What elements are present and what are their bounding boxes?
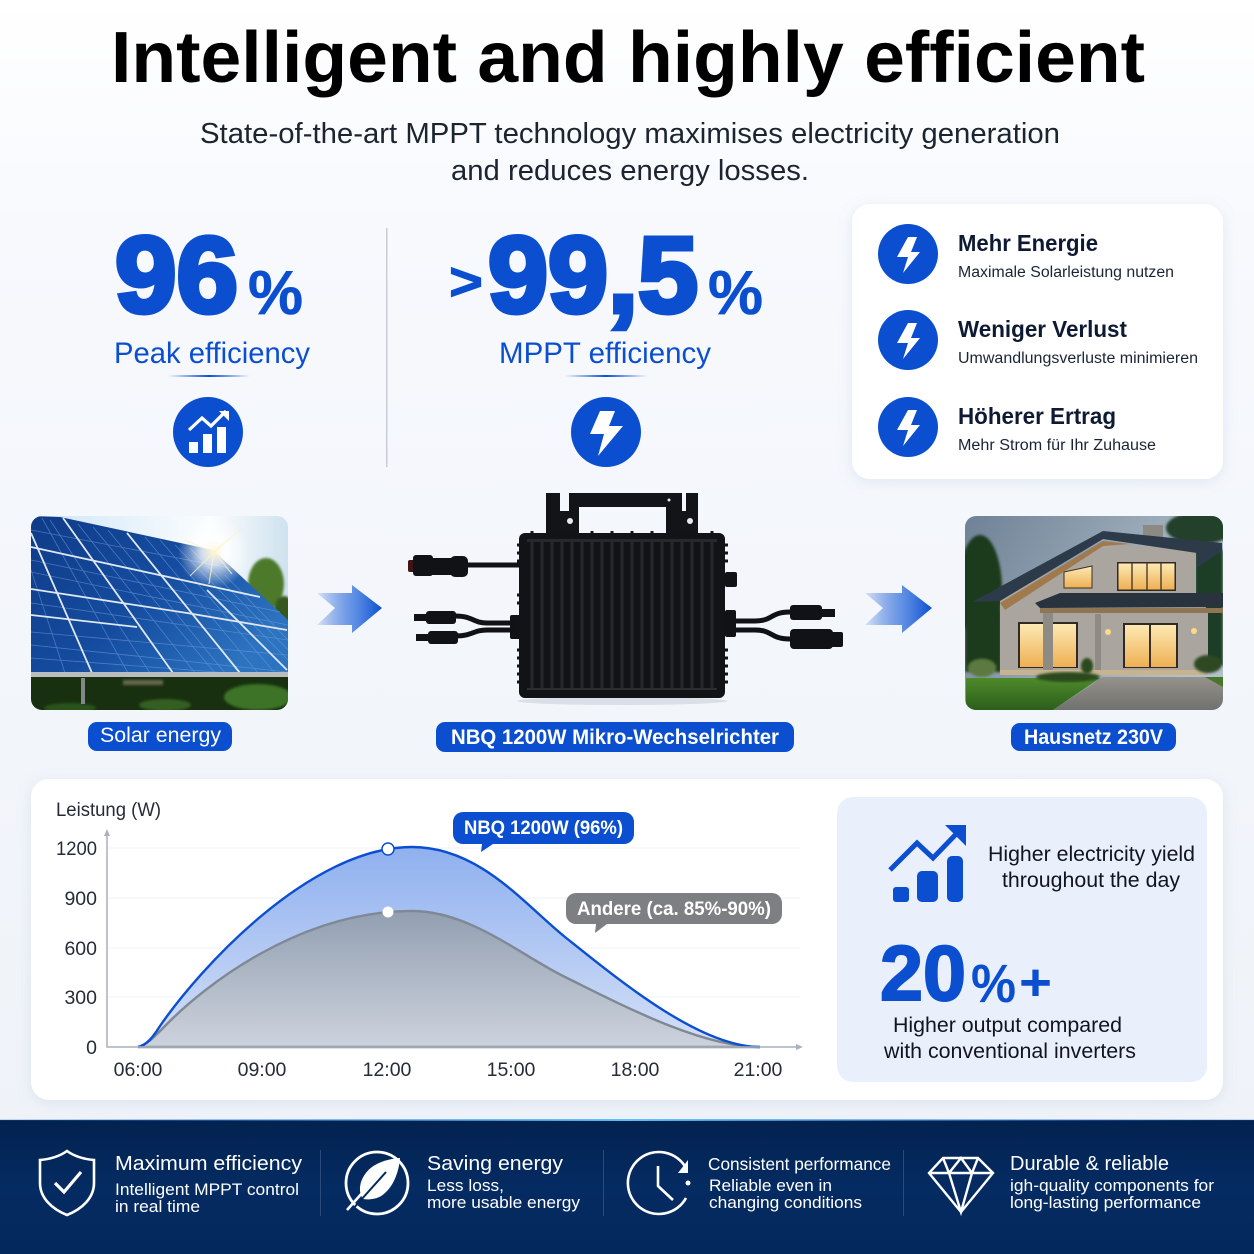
stat: peak efficiency: 96 — [115, 214, 238, 335]
benefit: higher yield: Höherer Ertrag — [958, 403, 1116, 429]
icon: diamond — [929, 1158, 993, 1212]
feature: consistent performance: Consistent performance — [708, 1154, 891, 1174]
axis labels: 600 — [64, 938, 97, 960]
axis labels — [56, 799, 783, 1081]
panel: higher output: Higher electricity yield — [988, 843, 1195, 866]
benefit: more energy: Maximale Solarleistung nutzen — [958, 264, 1174, 281]
photo: house — [958, 512, 1234, 710]
cables — [455, 565, 790, 639]
feature: maximum efficiency: Intelligent MPPT control — [115, 1180, 299, 1199]
markers — [382, 843, 394, 918]
benefit: more energy — [878, 224, 1174, 284]
inverter — [408, 493, 843, 705]
icon: leaf — [346, 1152, 408, 1214]
icon: clock — [628, 1152, 690, 1214]
axis labels: 15:00 — [487, 1059, 536, 1081]
divider — [386, 228, 388, 467]
axes — [107, 833, 798, 1047]
feature: durable: igh-quality components for — [1010, 1176, 1214, 1195]
feature: saving energy — [346, 1152, 580, 1214]
blue line — [138, 847, 760, 1047]
panel connectors — [414, 572, 843, 649]
benefit: less loss — [878, 310, 1198, 370]
stat: MPPT efficiency: MPPT efficiency — [499, 337, 711, 370]
icon: lightning bolt — [571, 397, 641, 467]
feature: consistent performance: changing conditions — [709, 1193, 862, 1212]
title: Intelligent and highly efficient — [111, 18, 1145, 98]
benefit: higher yield: Mehr Strom für Ihr Zuhause — [958, 437, 1156, 454]
icon: shield — [40, 1151, 94, 1215]
axis labels: Leistung (W) — [56, 799, 161, 821]
subtitle: State-of-the-art MPPT technology maximises electricity generation — [200, 118, 1060, 150]
stat: MPPT efficiency: > — [449, 252, 483, 312]
callout: NBQ: NBQ 1200W (96%) — [464, 818, 623, 839]
label: house grid: Hausnetz 230V — [1024, 726, 1163, 749]
feature: durable — [929, 1152, 1214, 1212]
icon: yield chart — [890, 825, 966, 902]
axis labels: 0 — [86, 1037, 97, 1059]
feature: maximum efficiency: in real time — [115, 1197, 200, 1216]
panel: higher output: % — [971, 954, 1016, 1014]
chart — [56, 799, 803, 1081]
stat: peak efficiency — [114, 214, 310, 467]
panel: benefits — [852, 204, 1223, 479]
arrow: inverter to house — [865, 585, 932, 633]
icon: growth chart — [173, 397, 243, 467]
feature: consistent performance — [628, 1152, 891, 1214]
mounting bracket — [546, 493, 698, 533]
panel: power chart — [31, 779, 1223, 1100]
stat: MPPT efficiency: 99,5 — [488, 214, 698, 335]
axis labels: 1200 — [56, 838, 97, 860]
photo: solar panel — [31, 516, 294, 713]
callout: others — [566, 893, 782, 933]
feature: saving energy: more usable energy — [427, 1193, 580, 1212]
feature: saving energy: Saving energy — [427, 1152, 564, 1175]
input connector — [408, 555, 468, 577]
blue area — [138, 847, 760, 1047]
subtitle: and reduces energy losses. — [451, 155, 809, 187]
stat: peak efficiency: Peak efficiency — [114, 337, 310, 370]
panel: higher output: Higher output compared — [893, 1014, 1122, 1037]
axis labels: 06:00 — [114, 1059, 163, 1081]
axis labels: 09:00 — [238, 1059, 287, 1081]
benefit: more energy: Mehr Energie — [958, 230, 1098, 256]
stat: MPPT efficiency: % — [708, 259, 763, 328]
footer band — [0, 1119, 1254, 1254]
callout: NBQ — [453, 812, 634, 852]
label: solar energy — [88, 722, 232, 751]
axis labels: 18:00 — [611, 1059, 660, 1081]
subtitle — [200, 118, 1060, 187]
feature: durable: long-lasting performance — [1010, 1193, 1201, 1212]
axis labels: 300 — [64, 987, 97, 1009]
feature: consistent performance: Reliable even in — [709, 1176, 832, 1195]
panel: higher output: 20 — [880, 929, 966, 1017]
benefit: higher yield — [878, 397, 1156, 457]
benefit: less loss: Umwandlungsverluste minimieren — [958, 350, 1198, 367]
axis labels: 900 — [64, 888, 97, 910]
callout: others: Andere (ca. 85%-90%) — [577, 899, 771, 920]
housing — [519, 533, 725, 698]
gray area — [138, 911, 760, 1047]
panel: higher output: throughout the day — [1002, 869, 1181, 892]
feature: saving energy: Less loss, — [427, 1176, 504, 1195]
feature: maximum efficiency — [40, 1151, 303, 1216]
stat: MPPT efficiency — [449, 214, 763, 467]
panel: higher output: + — [1019, 954, 1052, 1012]
label: solar energy: Solar energy — [100, 724, 221, 747]
arrow: solar to inverter — [317, 585, 382, 633]
stat: peak efficiency: % — [248, 259, 303, 328]
axis labels: 12:00 — [363, 1059, 412, 1081]
benefit: less loss: Weniger Verlust — [958, 316, 1127, 342]
feature: durable: Durable & reliable — [1010, 1152, 1169, 1175]
feature: maximum efficiency: Maximum efficiency — [115, 1152, 303, 1175]
panel: higher output — [837, 797, 1207, 1082]
axis labels: 21:00 — [734, 1059, 783, 1081]
panel: higher output: with conventional inverters — [883, 1040, 1136, 1063]
label: inverter: NBQ 1200W Mikro-Wechselrichter — [451, 726, 779, 749]
